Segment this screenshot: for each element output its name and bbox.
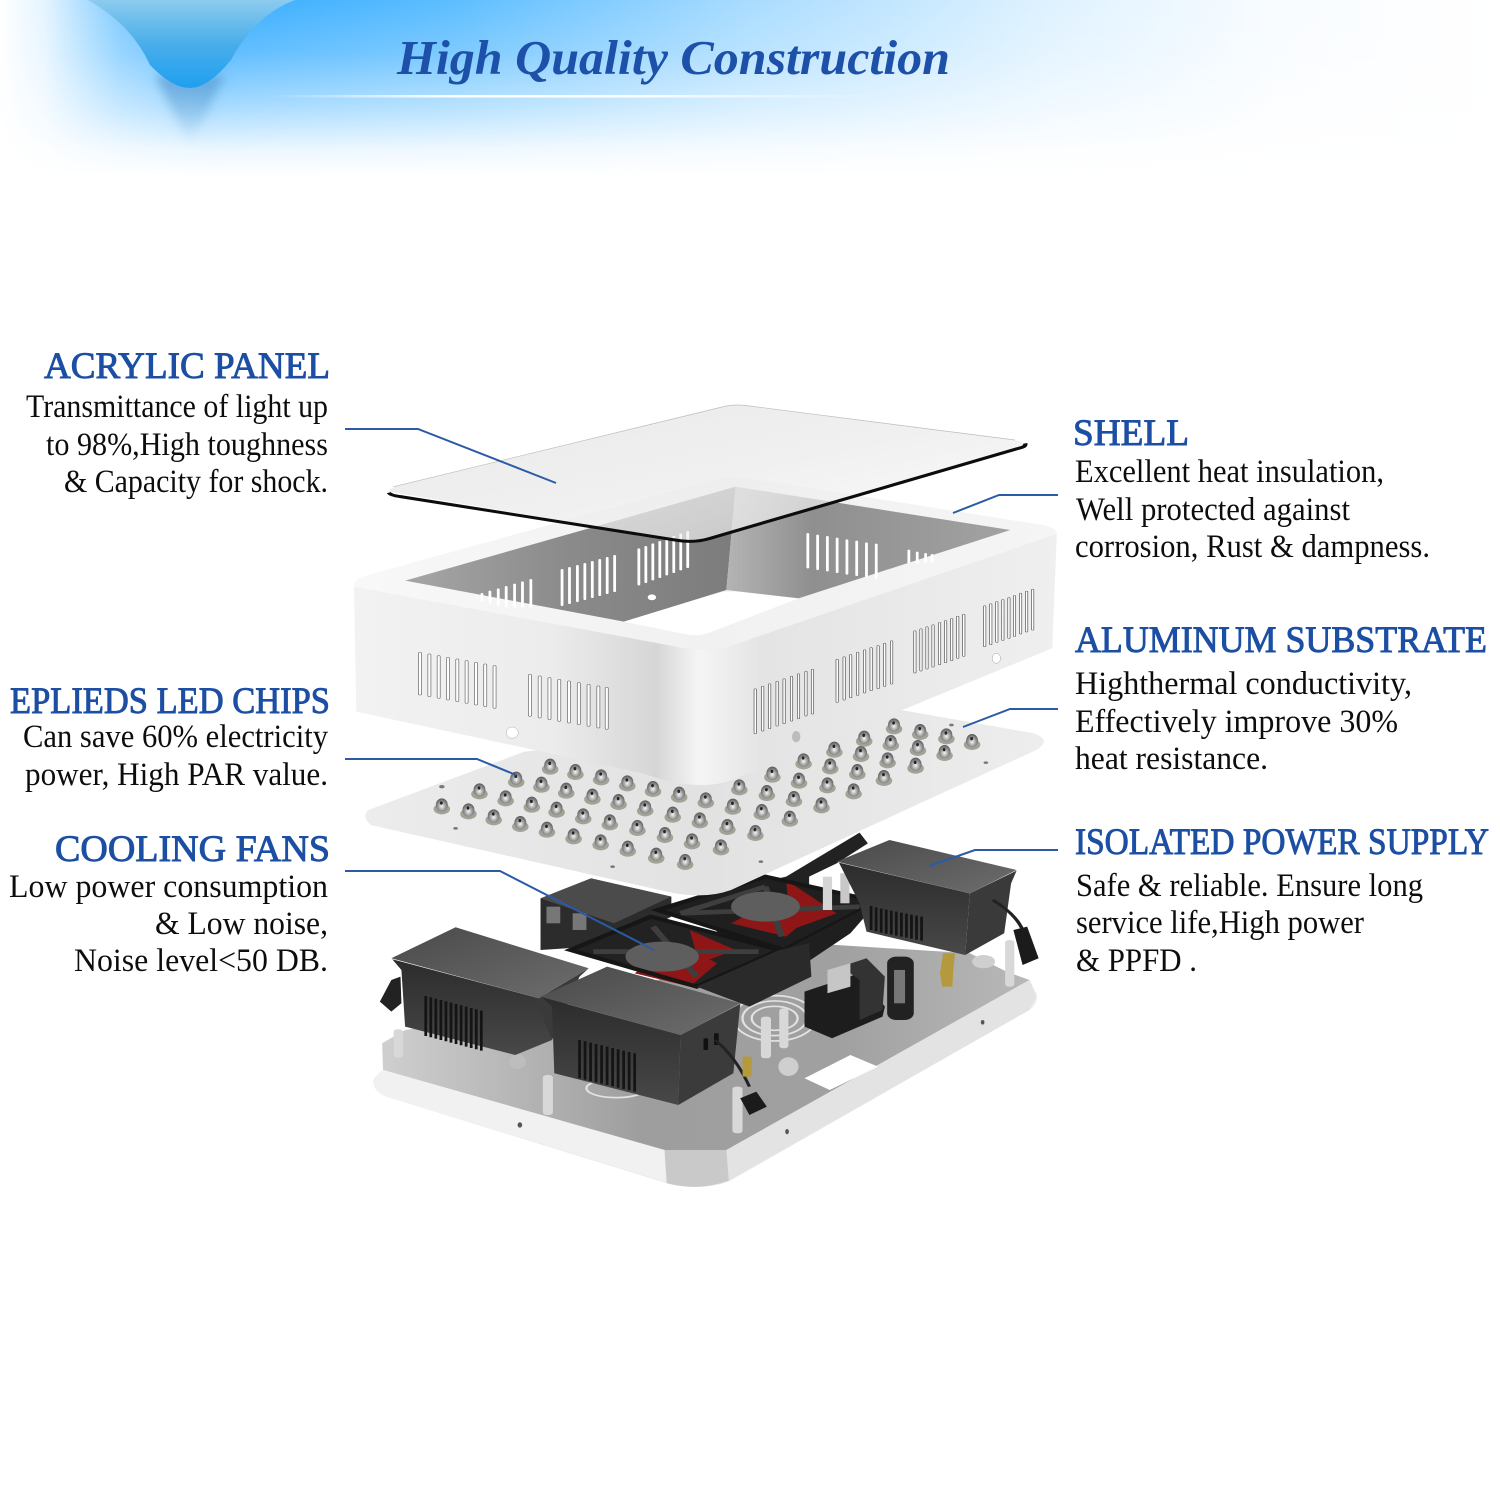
text: LED chips: EPLIEDS LED CHIPS [10, 681, 330, 722]
text: aluminum substrate [1075, 620, 1487, 777]
outlet and capacitor [805, 957, 914, 1038]
power box front left [380, 927, 589, 1055]
text: aluminum substrate: ALUMINUM SUBSTRATE [1075, 620, 1487, 661]
power box right [837, 840, 1039, 965]
power box front center [541, 967, 767, 1115]
text: LED chips: Can save 60% electricity [23, 719, 328, 755]
callout line: aluminum substrate [963, 709, 1058, 727]
tray floor [382, 943, 1029, 1150]
tray flanges [374, 1070, 666, 1182]
text: cooling fans [9, 829, 330, 979]
power box rear [541, 878, 671, 950]
text: isolated power supply [1075, 822, 1489, 979]
aluminum substrate board [365, 710, 1044, 895]
shell outer faces [354, 533, 1057, 785]
bottom tray assembly [373, 833, 1039, 1187]
acrylic panel [389, 405, 1025, 541]
text: acrylic panel: & Capacity for shock. [64, 464, 328, 500]
text: cooling fans: COOLING FANS [55, 829, 330, 870]
text: isolated power supply: & PPFD . [1076, 943, 1197, 979]
text: acrylic panel: to 98%,High toughness [46, 427, 328, 463]
title: High Quality Construction [396, 30, 950, 85]
callout line: LED chips [345, 759, 516, 775]
text: LED chips: power, High PAR value. [25, 757, 328, 793]
tray base [373, 980, 1037, 1187]
tray cutout [805, 1055, 878, 1090]
icon: ribbon drop [88, 0, 295, 88]
text: isolated power supply: service life,High power [1076, 905, 1364, 941]
text: cooling fans: Noise level<50 DB. [74, 943, 328, 979]
right-side vents [755, 590, 1033, 733]
cooling fan front [570, 917, 811, 1007]
text: LED chips [10, 681, 330, 793]
brass lug and screw [509, 953, 995, 1076]
text: shell: SHELL [1073, 413, 1189, 454]
header banner [0, 0, 1500, 176]
text: shell: Excellent heat insulation, [1075, 454, 1384, 490]
fan grill [586, 996, 816, 1098]
text: cooling fans: & Low noise, [155, 906, 328, 942]
callout line: cooling fans [345, 871, 654, 950]
text: acrylic panel [26, 346, 330, 500]
shell interior walls [405, 487, 736, 622]
dark rear frame under board [699, 833, 868, 977]
callout line: shell [953, 495, 1058, 513]
text: acrylic panel: ACRYLIC PANEL [44, 346, 330, 387]
standoffs [394, 940, 1014, 1133]
cooling fan rear [658, 873, 878, 973]
text: acrylic panel: Transmittance of light up [26, 389, 328, 425]
front-left vents [420, 653, 607, 728]
text: shell [1073, 413, 1430, 565]
text: shell: corrosion, Rust & dampness. [1075, 529, 1430, 565]
text: cooling fans: Low power consumption [9, 869, 328, 905]
callout line: acrylic panel [345, 429, 556, 483]
text: aluminum substrate: Effectively improve 30% [1075, 704, 1398, 740]
shell [354, 477, 1057, 785]
text: aluminum substrate: Highthermal conductivity, [1075, 666, 1412, 702]
header rule [270, 95, 870, 98]
text: isolated power supply: Safe & reliable. Ensure long [1076, 868, 1423, 904]
icon: drop shadow [155, 75, 225, 142]
shell rim [354, 477, 1057, 650]
callout line: power supply [929, 850, 1058, 866]
text: aluminum substrate: heat resistance. [1075, 741, 1268, 777]
text: shell: Well protected against [1076, 492, 1350, 528]
white opening [624, 592, 799, 635]
inner vents [482, 532, 932, 607]
LED chips [434, 718, 980, 870]
